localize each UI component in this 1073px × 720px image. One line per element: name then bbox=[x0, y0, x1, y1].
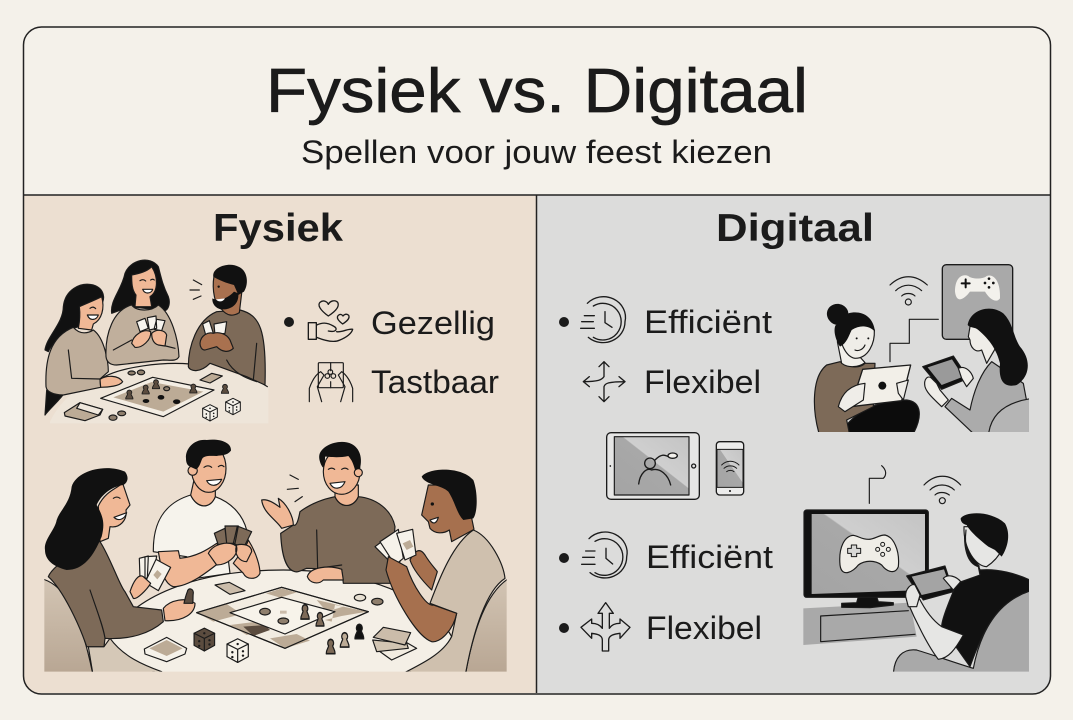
wifi bbox=[890, 277, 927, 305]
left woman bbox=[45, 284, 123, 415]
wifi bbox=[924, 476, 961, 504]
bullet: Flexibel lower bbox=[559, 623, 569, 633]
illustration: two women with tablets bbox=[814, 265, 1033, 437]
icon: fast clock lower bbox=[582, 532, 627, 578]
illustration: friends playing a board game, small bbox=[45, 260, 268, 423]
cable bbox=[890, 319, 938, 362]
controller bbox=[840, 535, 899, 573]
label: Gezellig: Gezellig bbox=[371, 305, 495, 341]
left woman bbox=[814, 304, 919, 437]
bullet: Gezellig bbox=[284, 317, 294, 327]
middle woman bbox=[106, 260, 179, 365]
icon: hands holding box bbox=[309, 363, 353, 402]
label: Efficiënt: Efficiënt bbox=[644, 304, 772, 340]
bullet: Efficiënt bbox=[559, 317, 569, 327]
ticks bbox=[190, 280, 202, 299]
man on the right bbox=[375, 470, 512, 677]
icon: phone with wifi bbox=[716, 442, 744, 495]
label: Flexibel lower: Flexibel bbox=[646, 610, 762, 646]
panel: Digitaal background bbox=[536, 195, 1050, 693]
label: Flexibel: Flexibel bbox=[644, 364, 761, 400]
man in white shirt bbox=[153, 440, 260, 587]
man bbox=[906, 513, 1033, 667]
bearded man bbox=[188, 265, 265, 385]
man in brown sweater bbox=[262, 442, 395, 583]
cable bbox=[869, 466, 886, 503]
game board bbox=[101, 377, 229, 417]
bullet: Efficiënt lower bbox=[559, 553, 569, 563]
icon: four way arrows bbox=[583, 362, 625, 402]
icon: tablet bbox=[607, 433, 699, 499]
game board bbox=[197, 587, 383, 648]
woman on the left bbox=[40, 468, 195, 677]
wall screen with controller bbox=[942, 265, 1013, 339]
icon: hand with hearts bbox=[308, 301, 353, 341]
heading: Fysiek: Fysiek bbox=[213, 207, 343, 250]
subtitle: Spellen voor jouw feest kiezen bbox=[301, 134, 772, 170]
heading: Digitaal: Digitaal bbox=[716, 207, 874, 250]
panel: Fysiek background bbox=[24, 195, 536, 693]
illustration: friends playing a board game, large bbox=[40, 440, 512, 677]
label: Efficiënt lower: Efficiënt bbox=[646, 539, 773, 575]
tv stand bbox=[803, 597, 917, 645]
icon: fast clock bbox=[581, 297, 625, 343]
television bbox=[804, 510, 928, 597]
coins, card and dice bbox=[64, 370, 240, 421]
dice bbox=[194, 628, 248, 662]
icon: branching arrows bbox=[581, 603, 630, 651]
label: Tastbaar: Tastbaar bbox=[371, 364, 499, 400]
chair bbox=[893, 590, 1033, 677]
pawns bbox=[301, 605, 364, 654]
right woman bbox=[923, 309, 1033, 437]
card stacks bbox=[144, 582, 417, 662]
illustration: man gaming in front of television bbox=[803, 466, 1033, 677]
title: Fysiek vs. Digitaal bbox=[266, 57, 808, 126]
